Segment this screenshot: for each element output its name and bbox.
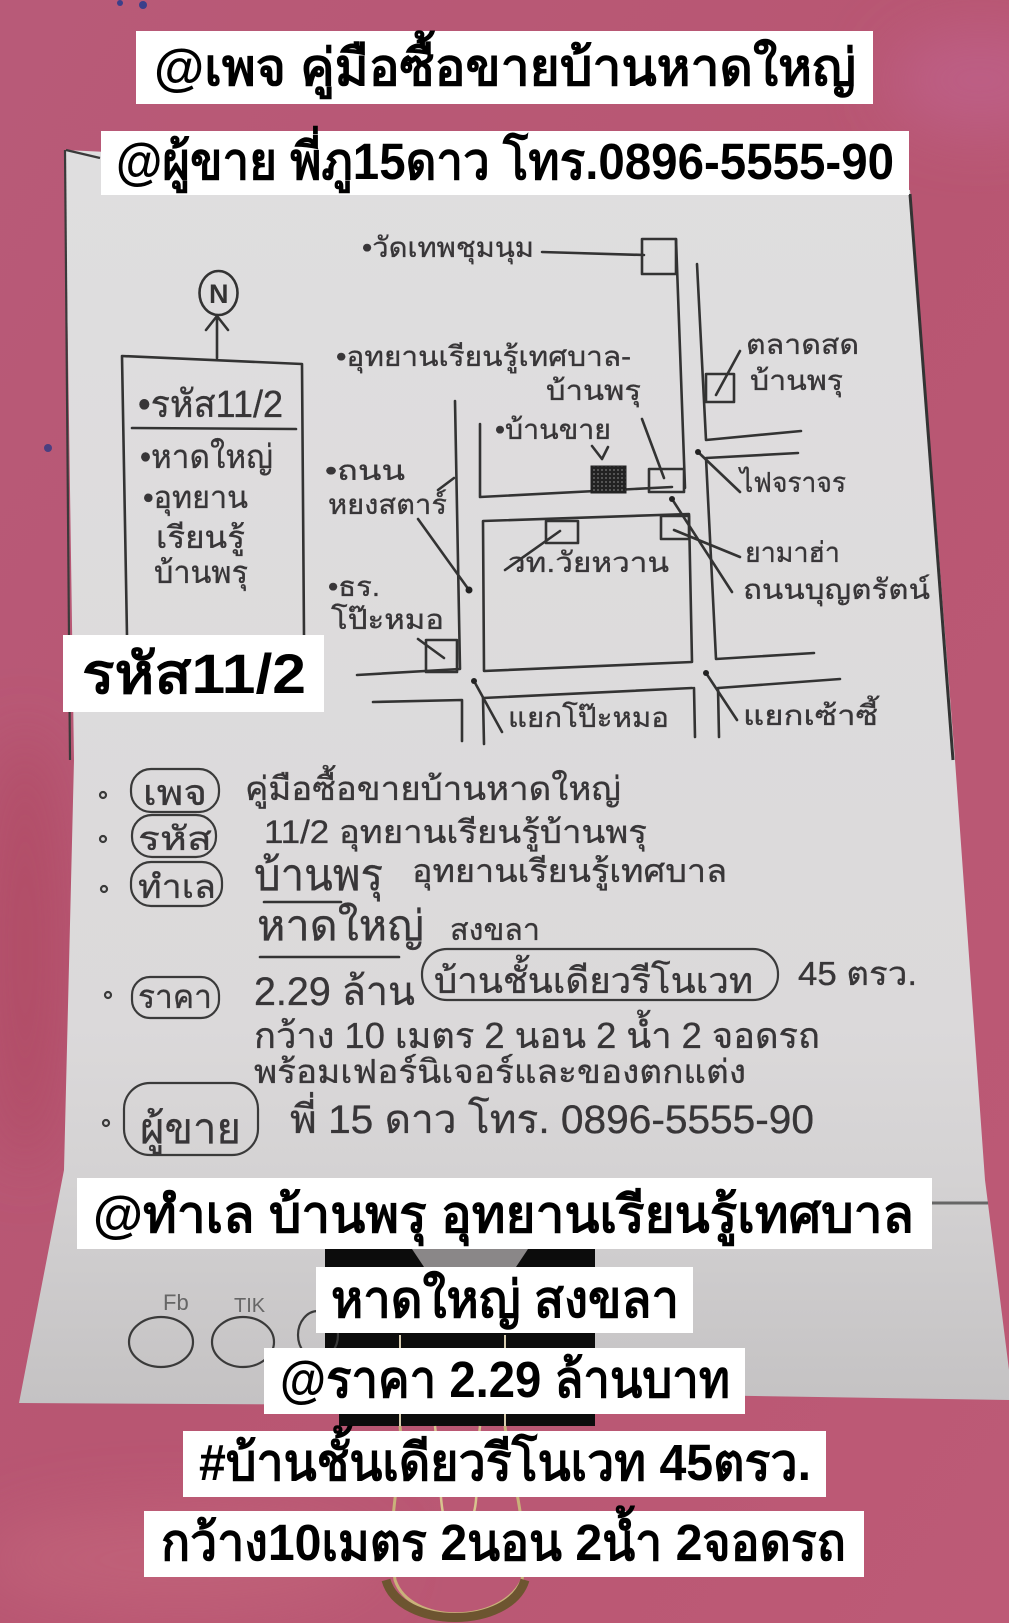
row: location: อุทยานเรียนรู้เทศบาล [412,853,727,891]
map labels: แยกเซ้าซี้ [743,695,880,731]
banner: location: @ทำเล บ้านพรุ อุทยานเรียนรู้เทศบาล [93,1186,914,1247]
banner: house type: #บ้านชั้นเดียวรีโนเวท 45ตรว. [199,1425,811,1491]
row: code [100,814,647,857]
row: seller [103,1083,814,1155]
social media circles: Fb [163,1290,189,1315]
map labels: •บ้านขาย [495,414,611,445]
banner: page name: @เพจ คู่มือซื้อขายบ้านหาดใหญ่ [154,30,856,100]
social media circles [129,1290,338,1367]
row: page: คู่มือซื้อขายบ้านหาดใหญ่ [245,765,621,809]
map landmarks [418,239,740,732]
map labels: ตลาดสด [746,329,859,360]
panel: handwritten paper sheet [19,150,1009,1405]
row: location [101,851,727,957]
map labels: บ้านพรุ [750,365,843,398]
map labels: แยกโป๊ะหมอ [508,701,669,733]
banner: code [63,635,324,712]
map labels: โป๊ะหมอ [331,603,444,635]
map labels: •วัดเทพชุมนุม [362,232,534,265]
map labels: หยงสตาร์ [328,489,447,520]
row: page [100,765,621,813]
legend box with north arrow: •อุทยาน [143,480,248,517]
row: price: พร้อมเฟอร์นิเจอร์และของตกแต่ง [254,1053,746,1090]
row: seller: ผู้ขาย [140,1105,241,1154]
icon: north arrow: N [209,279,228,309]
row: location: สงขลา [450,914,540,947]
handwritten details list [100,765,917,1155]
row: location: บ้านพรุ [254,851,383,902]
row: location: หาดใหญ่ [257,902,424,950]
map labels: •ธร. [328,571,380,602]
map labels: ไฟจราจร [738,467,846,498]
row: code: รหัส [138,820,212,857]
row: price: 45 ตรว. [798,955,917,992]
row: price: ราคา [138,978,212,1015]
legend box with north arrow: เรียนรู้ [156,520,245,556]
row: price: กว้าง 10 เมตร 2 นอน 2 น้ำ 2 จอดรถ [254,1009,820,1056]
row: price: 2.29 ล้าน [254,970,415,1014]
map labels: •ถนน [325,455,405,486]
legend box with north arrow: •รหัส11/2 [138,384,283,426]
map labels: วท.วัยหวาน [508,547,669,578]
icon: north arrow [200,271,238,358]
row: location: ทำเล [138,868,216,905]
row: code: 11/2 อุทยานเรียนรู้บ้านพรุ [264,814,647,852]
map labels: บ้านพรุ [546,375,641,408]
map labels: ยามาฮ่า [745,537,840,568]
map labels [325,232,930,733]
row: seller: พี่ 15 ดาว โทร. 0896-5555-90 [290,1092,814,1142]
hand-drawn road map [325,232,930,744]
map labels: •อุทยานเรียนรู้เทศบาล- [336,341,631,374]
banner: price: @ราคา 2.29 ล้านบาท [280,1351,730,1408]
banner: district: หาดใหญ่ สงขลา [331,1270,679,1329]
map roads [357,239,840,744]
banner: code: รหัส11/2 [82,642,306,705]
row: price: บ้านชั้นเดียวรีโนเวท [434,954,753,1001]
legend box with north arrow [122,271,304,636]
legend box with north arrow: บ้านพรุ [154,555,248,592]
banner: seller: @ผู้ขาย พี่ภู15ดาว โทร.0896-5555-90 [116,126,894,194]
row: price [105,949,917,1090]
row: page: เพจ [143,772,207,813]
social media circles: TIK [234,1295,266,1317]
banner: house size: กว้าง10เมตร 2นอน 2น้ำ 2จอดรถ [161,1505,846,1571]
legend box with north arrow: •หาดใหญ่ [140,438,273,475]
binder clip [325,1249,595,1618]
map labels: ถนนบุญตรัตน์ [743,574,930,607]
